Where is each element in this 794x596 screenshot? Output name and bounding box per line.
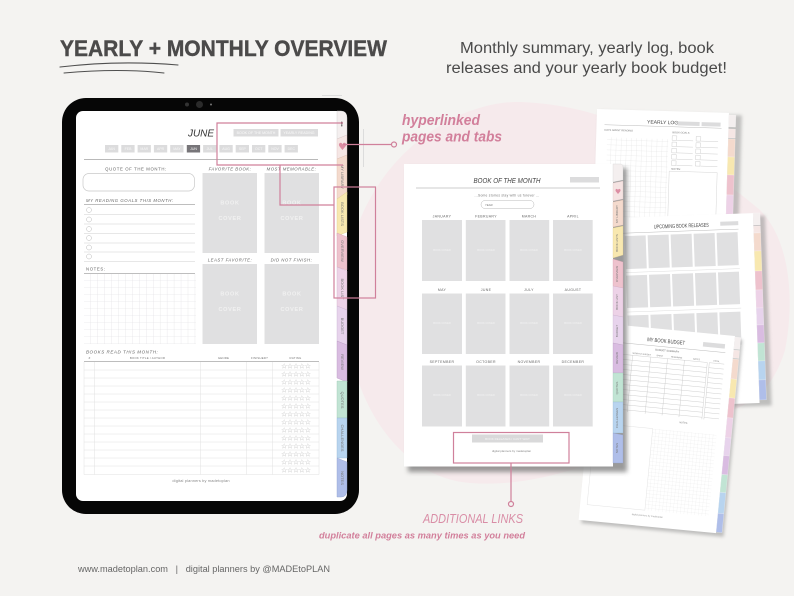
book cover slots: COVER [218, 216, 242, 222]
book cover slots: BOOK [282, 292, 302, 298]
book cover slots [202, 166, 319, 344]
notes grid [84, 266, 196, 344]
pink background blob [345, 102, 790, 484]
month labels: SEPTEMBER [430, 360, 454, 364]
tablet tabs: ••• [338, 121, 344, 127]
subtitle [446, 40, 727, 77]
books read table: BOOKS READ THIS MONTH: [86, 350, 159, 354]
main page tabs: BUDGET [615, 325, 619, 337]
main page tabs: MY LIBRARY [615, 205, 619, 223]
page: upcoming book releases [613, 213, 772, 411]
books read table: RATING [290, 356, 302, 360]
main page tabs: BOOK LIST [615, 294, 619, 310]
page: my book budget: NOTES [679, 422, 688, 425]
page: my book budget: SPENT [656, 355, 664, 358]
month labels: OCTOBER [476, 360, 496, 364]
page: my book budget [578, 323, 743, 537]
page: book of the month [404, 164, 627, 472]
callout: hyperlinked pages and tabs [401, 113, 502, 146]
book cover slots: MOST MEMORABLE: [267, 166, 317, 172]
page: upcoming book releases: UPCOMING BOOK RELEASES [654, 223, 709, 231]
main page tabs [613, 164, 623, 463]
page link buttons [234, 129, 318, 136]
tablet tabs: QUOTES [340, 392, 345, 409]
star ratings: ☆☆☆☆☆ [281, 442, 311, 450]
yearly log tabs [725, 115, 736, 233]
month labels: DECEMBER [562, 360, 584, 364]
additional links highlight and connector [454, 432, 569, 506]
tablet tabs: CHALLENGES [340, 425, 345, 452]
month selector: JUL [207, 147, 213, 151]
month labels: AUGUST [565, 288, 582, 292]
star ratings: ☆☆☆☆☆ [281, 450, 311, 458]
star ratings: ☆☆☆☆☆ [281, 434, 311, 442]
page: my book budget: MY BOOK BUDGET [647, 337, 686, 347]
book releases button: BOOK RELEASES / CAN'T WAIT [485, 437, 530, 441]
page: my book budget: TOTAL [713, 360, 721, 363]
page: my book budget: digital planners by madetoplan [632, 513, 664, 519]
page: yearly log [591, 109, 742, 320]
star ratings: ☆☆☆☆☆ [281, 370, 311, 378]
book cover slots: LEAST FAVORITE: [208, 258, 253, 262]
star ratings: ☆☆☆☆☆ [281, 386, 311, 394]
star ratings [281, 362, 311, 474]
page: book of the month: BOOK COVER [520, 321, 538, 325]
subtitle: releases and your yearly book budget! [446, 60, 727, 77]
month selector: JUN [190, 147, 197, 151]
page: book of the month: BOOK COVER [564, 321, 582, 325]
main page heading: BOOK OF THE MONTH [474, 176, 541, 185]
star ratings: ☆☆☆☆☆ [281, 378, 311, 386]
month selector: DEC [288, 147, 295, 151]
notes grid: NOTES: [86, 266, 106, 272]
page: my book budget: REMAINING [671, 355, 683, 360]
hyperlink highlight boxes [217, 123, 396, 298]
month labels: NOVEMBER [518, 360, 541, 364]
quote of the month [83, 166, 194, 191]
tablet tabs: BOOK LIST [340, 278, 345, 300]
books read table: BOOK TITLE / AUTHOR [130, 356, 165, 360]
camera [185, 101, 212, 108]
page: my book budget: NOTES [693, 359, 701, 361]
main page tabs: REVIEW [615, 352, 619, 364]
main page tabs: BOOK LISTS [615, 234, 619, 252]
tablet tabs: BOOK LISTS [340, 202, 345, 226]
month selector: OCT [255, 147, 263, 151]
book cover slots: BOOK [282, 200, 302, 206]
books read table: FINISHED? [251, 356, 268, 360]
callout note: duplicate all pages as many times as you need [319, 530, 526, 540]
page: my book budget: MONTHLY BUDGET [632, 353, 652, 357]
book cover slots: COVER [280, 216, 304, 222]
star ratings: ☆☆☆☆☆ [281, 394, 311, 402]
tablet tabs: MY LIBRARY [340, 165, 345, 189]
book cover slots: COVER [218, 307, 242, 313]
tablet tabs: OVERVIEW [340, 240, 345, 262]
page: book of the month: BOOK COVER [520, 248, 538, 252]
page: book of the month: BOOK COVER [564, 248, 582, 252]
month heading: JUNE [187, 128, 214, 140]
page: book of the month: BOOK COVER [520, 393, 538, 397]
callout: additional links: ADDITIONAL LINKS [422, 511, 523, 526]
month selector: MAR [140, 147, 149, 151]
upcoming page tabs [753, 213, 766, 400]
month selector: JAN [108, 147, 115, 151]
tablet buttons [322, 96, 364, 167]
star ratings: ☆☆☆☆☆ [281, 402, 311, 410]
month labels: FEBRUARY [475, 214, 497, 218]
month labels: MAY [438, 288, 447, 292]
month selector: APR [157, 147, 165, 151]
main page tabs: QUOTES [615, 382, 619, 394]
title underline strokes [60, 63, 178, 73]
page: book of the month: BOOK COVER [433, 393, 451, 397]
callout: hyperlinked pages and tabs: pages and tabs [401, 130, 502, 146]
subtitle: Monthly summary, yearly log, book [460, 40, 714, 57]
month selector: AUG [222, 147, 230, 151]
book cover slots: DID NOT FINISH: [271, 258, 313, 262]
books read table: GENRE [218, 356, 229, 360]
month labels: JANUARY [433, 214, 452, 218]
page: my book budget: BUDGET SUMMARY [655, 348, 680, 354]
month selector: SEP [239, 147, 247, 151]
books read table: # [89, 356, 91, 360]
month selector [105, 145, 298, 152]
book cover slots: BOOK [220, 292, 240, 298]
main page tabs: CHALLENGES [615, 408, 619, 428]
footer: www.madetoplan.com | digital planners by @MADEtoPLAN [77, 564, 330, 574]
month selector: NOV [271, 147, 279, 151]
month labels [430, 214, 584, 364]
month labels: JUNE [481, 288, 492, 292]
callout: hyperlinked pages and tabs: hyperlinked [402, 113, 481, 129]
page: yearly log: NOTES: [671, 167, 681, 171]
year pill: YEAR [485, 203, 493, 207]
page: book of the month: BOOK COVER [433, 248, 451, 252]
page link buttons: BOOK OF THE MONTH [237, 131, 276, 135]
page: book of the month: BOOK COVER [477, 393, 495, 397]
page: book of the month: ...Some stories stay with us forever ... [475, 194, 539, 198]
reading goals: MY READING GOALS THIS MONTH: [86, 198, 174, 203]
budget page tabs [716, 337, 741, 533]
year pill [481, 200, 534, 208]
month selector: MAY [173, 147, 181, 151]
tablet tabs [337, 111, 347, 497]
page: book of the month: digital planners by madetoplan [492, 449, 531, 453]
book cover slots: COVER [280, 307, 304, 313]
reading goals [84, 198, 195, 262]
tablet tabs: ♥ [338, 142, 347, 153]
month cover slots [422, 220, 593, 426]
tablet tabs: BUDGET [340, 318, 345, 335]
star ratings: ☆☆☆☆☆ [281, 418, 311, 426]
page link buttons: YEARLY READING [283, 131, 315, 135]
tablet screen page [76, 111, 347, 501]
tablet tabs: REVIEW [340, 354, 345, 370]
month labels: JULY [524, 288, 534, 292]
quote of the month: QUOTE OF THE MONTH: [105, 166, 167, 172]
main page tabs: OVERVIEW [615, 266, 619, 282]
book cover slots: BOOK [220, 200, 240, 206]
page: yearly log: BOOK GOALS [672, 130, 690, 135]
page: book of the month: BOOK COVER [564, 393, 582, 397]
book cover slots: FAVORITE BOOK: [209, 166, 252, 172]
star ratings: ☆☆☆☆☆ [281, 410, 311, 418]
tablet device [62, 96, 364, 514]
month selector: FEB [125, 147, 132, 151]
star ratings: ☆☆☆☆☆ [281, 426, 311, 434]
tablet footer credit: digital planners by madetoplan [172, 478, 230, 483]
title: YEARLY + MONTHLY OVERVIEW [60, 36, 387, 61]
main page tabs: NOTES [615, 443, 619, 453]
books read table [84, 350, 319, 474]
month labels: MARCH [522, 214, 536, 218]
main page tabs: ♥ [615, 188, 621, 196]
page: book of the month: BOOK COVER [433, 321, 451, 325]
star ratings: ☆☆☆☆☆ [281, 362, 311, 370]
page: book of the month: BOOK COVER [477, 248, 495, 252]
page: book of the month: BOOK COVER [477, 321, 495, 325]
star ratings: ☆☆☆☆☆ [281, 458, 311, 466]
month labels: APRIL [567, 214, 579, 218]
book releases button [472, 434, 543, 442]
star ratings: ☆☆☆☆☆ [281, 466, 311, 474]
page: yearly log: YEARLY LOG [647, 119, 678, 126]
tablet tabs: NOTES [340, 471, 345, 485]
page: yearly log: DAYS SPENT READING [604, 128, 633, 133]
